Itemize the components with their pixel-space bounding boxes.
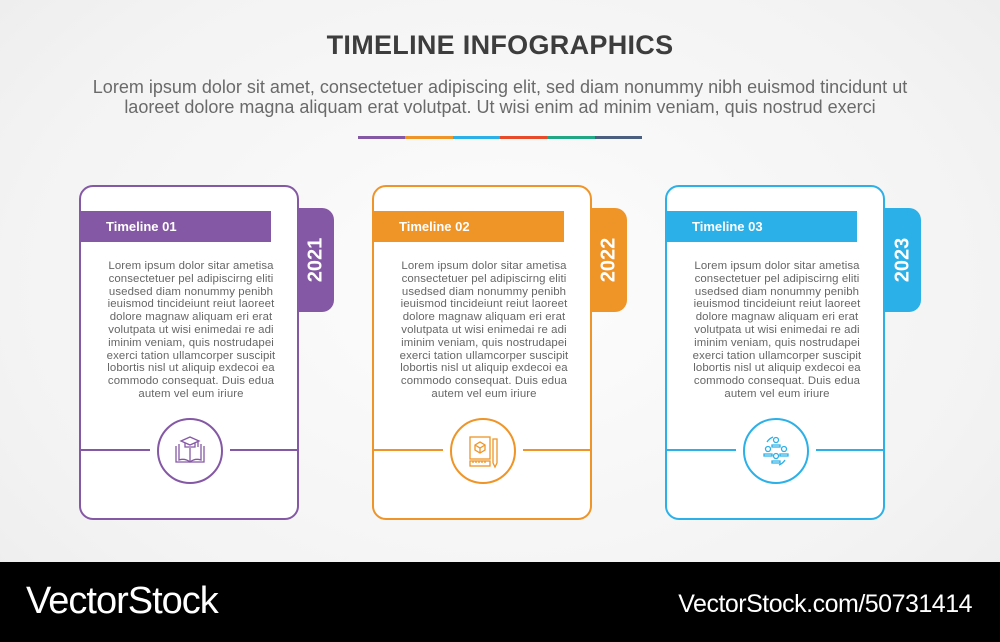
text block: lobortis nisl ut aliquip exdecoi ea [107, 362, 275, 374]
text block: usedsed diam nonummy penibh [402, 286, 566, 298]
text block: ieuismod tincideiunt reiut laoreet [401, 298, 567, 310]
tab: 2021: 2021 [304, 238, 326, 282]
title: TIMELINE INFOGRAPHICS [327, 30, 673, 60]
text block: dolore magnaw aliquam eri erat [403, 311, 565, 323]
text block: Lorem ipsum dolor sitar ametisa [401, 260, 567, 272]
icon: book with graduation cap [157, 418, 223, 484]
text block: iminim veniam, quis nostrudapei [108, 337, 274, 349]
header: Timeline 02 [374, 211, 564, 242]
text block: consectetuer pel adipiscirng eliti [109, 273, 273, 285]
text block: dolore magnaw aliquam eri erat [696, 311, 858, 323]
text block: Lorem ipsum dolor sitar ametisa [108, 260, 274, 272]
text block: commodo consequat. Duis edua [401, 375, 567, 387]
panel: timeline 02 [372, 185, 592, 520]
subtitle: Lorem ipsum dolor sit amet, consectetuer adipiscing elit, sed diam nonummy nibh euismod tincidunt ut [93, 77, 907, 97]
footer url: VectorStock.com/50731414 [678, 590, 972, 618]
text block: lobortis nisl ut aliquip exdecoi ea [693, 362, 861, 374]
text block [107, 260, 276, 400]
footer bar [0, 562, 1000, 642]
text block: ieuismod tincideiunt reiut laoreet [694, 298, 860, 310]
panel: timeline 01 [79, 185, 299, 520]
text block: ieuismod tincideiunt reiut laoreet [108, 298, 274, 310]
subtitle: laoreet dolore magna aliquam erat volutpat. Ut wisi enim ad minim veniam, quis nostrud exerci [124, 97, 876, 117]
text block: Lorem ipsum dolor sitar ametisa [694, 260, 860, 272]
header: Timeline 02: Timeline 02 [399, 219, 470, 234]
text block: autem vel eum iriure [724, 388, 830, 400]
text block [400, 260, 568, 400]
icon: team cycle [743, 418, 809, 484]
footer logo: VectorStock [26, 580, 218, 622]
tab: 2021 [297, 208, 334, 312]
text block: consectetuer pel adipiscirng eliti [695, 273, 859, 285]
text block: volutpata ut wisi enimedai re adi [401, 324, 567, 336]
header: Timeline 03 [667, 211, 857, 242]
header: Timeline 01: Timeline 01 [106, 219, 177, 234]
subtitle [93, 77, 908, 117]
text block: exerci tation ullamcorper suscipit [400, 350, 568, 362]
text block: iminim veniam, quis nostrudapei [694, 337, 860, 349]
text block: commodo consequat. Duis edua [694, 375, 860, 387]
text block: usedsed diam nonummy penibh [109, 286, 273, 298]
text block: exerci tation ullamcorper suscipit [107, 350, 275, 362]
text block: consectetuer pel adipiscirng eliti [402, 273, 566, 285]
tab: 2022 [590, 208, 627, 312]
text block: commodo consequat. Duis edua [108, 375, 274, 387]
text block [693, 260, 862, 400]
text block: lobortis nisl ut aliquip exdecoi ea [400, 362, 568, 374]
icon: design book with pencil [450, 418, 516, 484]
tab: 2023: 2023 [891, 238, 913, 282]
panel: timeline 03 [665, 185, 885, 520]
text block: autem vel eum iriure [431, 388, 537, 400]
tab: 2022: 2022 [597, 238, 619, 282]
header: Timeline 01 [81, 211, 271, 242]
text block: usedsed diam nonummy penibh [695, 286, 859, 298]
text block: dolore magnaw aliquam eri erat [110, 311, 272, 323]
header: Timeline 03: Timeline 03 [692, 219, 763, 234]
tab: 2023 [884, 208, 921, 312]
color bar [358, 136, 642, 139]
text block: autem vel eum iriure [138, 388, 244, 400]
text block: volutpata ut wisi enimedai re adi [694, 324, 860, 336]
text block: exerci tation ullamcorper suscipit [693, 350, 861, 362]
text block: iminim veniam, quis nostrudapei [401, 337, 567, 349]
text block: volutpata ut wisi enimedai re adi [108, 324, 274, 336]
